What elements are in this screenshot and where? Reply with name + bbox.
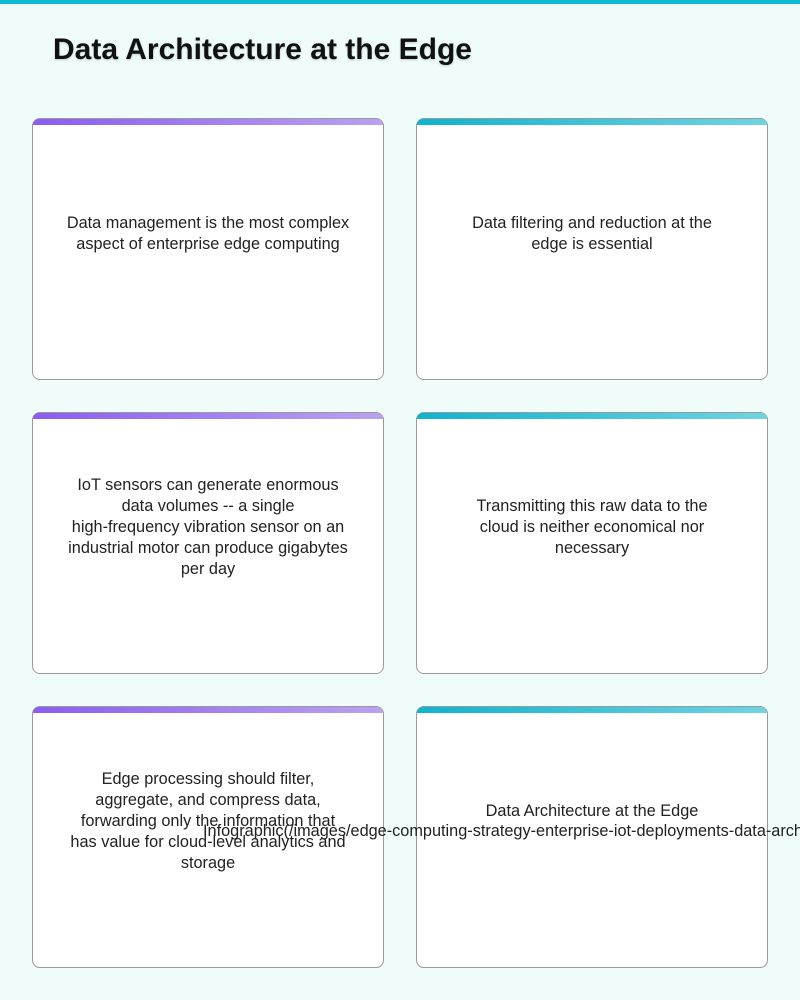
card 4 — [416, 412, 768, 674]
title: Data Architecture at the Edge — [53, 33, 472, 66]
card 5 — [32, 706, 384, 968]
card 3: per day — [181, 560, 235, 578]
card 3: industrial motor can produce gigabytes — [68, 539, 348, 557]
card 4: Transmitting this raw data to the — [476, 497, 708, 515]
card 4: cloud is neither economical nor — [480, 518, 704, 536]
card 3: high-frequency vibration sensor on an — [72, 518, 344, 536]
card 5: has value for cloud-level analytics and — [70, 833, 346, 851]
card 1: aspect of enterprise edge computing — [76, 234, 340, 252]
card 5: forwarding only the information that — [81, 812, 335, 830]
card 6: Data Architecture at the Edge — [486, 802, 698, 820]
card 4: necessary — [555, 539, 629, 557]
card 1: Data management is the most complex — [67, 214, 349, 232]
card 2 — [416, 118, 768, 380]
card 3 — [32, 412, 384, 674]
card 5: Edge processing should filter, — [102, 770, 314, 788]
card 2: edge is essential — [531, 234, 653, 252]
card 3: data volumes -- a single — [122, 497, 294, 515]
card 5: storage — [181, 854, 235, 872]
card 1 — [32, 118, 384, 380]
card 2: Data filtering and reduction at the — [472, 214, 712, 232]
card 3: IoT sensors can generate enormous — [77, 476, 339, 494]
card 6 — [416, 706, 768, 968]
card 5: aggregate, and compress data, — [95, 791, 321, 809]
